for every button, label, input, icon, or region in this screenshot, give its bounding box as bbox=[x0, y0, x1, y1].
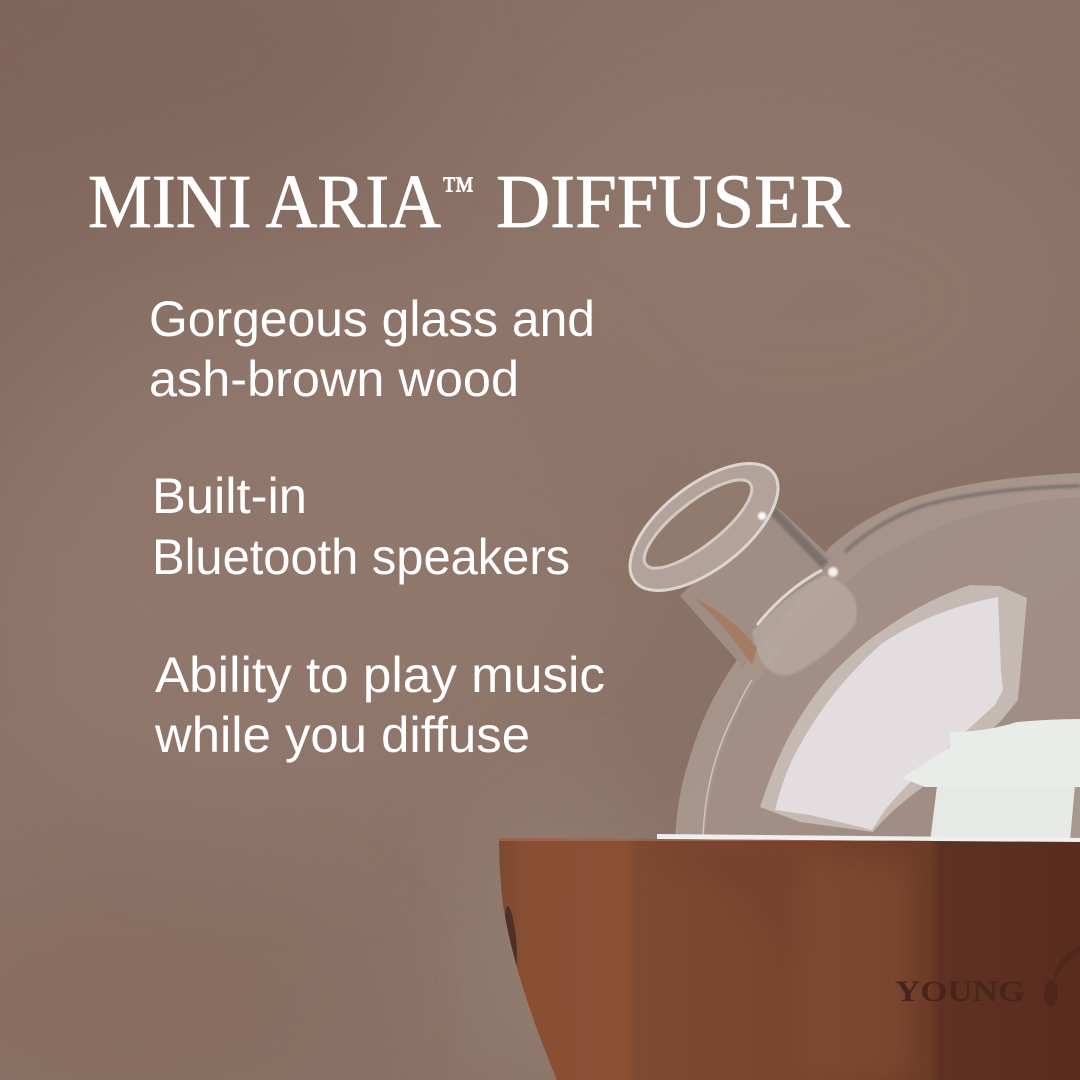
feature text: play music: Ability to play music bbox=[155, 647, 605, 703]
engraved logo bbox=[895, 945, 1080, 1008]
globe inner tint bbox=[705, 497, 1080, 840]
engraved logo: YOUNG bbox=[895, 975, 1025, 1008]
globe dark top edge reflection bbox=[845, 486, 1080, 552]
rim top highlight bbox=[499, 838, 932, 841]
neck dark reflection bbox=[772, 510, 825, 565]
white cap inside globe bbox=[902, 719, 1080, 842]
neck collar highlights bbox=[752, 575, 857, 675]
feature text: play music: while you diffuse bbox=[154, 707, 530, 763]
feature text: bluetooth speakers: Bluetooth speakers bbox=[152, 529, 570, 585]
reflection halo bbox=[760, 585, 1027, 832]
glass neck and rim bbox=[609, 440, 857, 675]
window reflection bbox=[775, 597, 1003, 830]
feature text: glass and wood: ash-brown wood bbox=[149, 351, 519, 407]
glass diffuser globe bbox=[675, 473, 1080, 840]
leaf stem bbox=[1053, 945, 1080, 983]
leaf drop bbox=[1044, 980, 1058, 1006]
rim shine bbox=[758, 512, 766, 520]
neck tube bbox=[680, 503, 832, 667]
globe left edge highlight bbox=[703, 680, 752, 838]
white base plate bbox=[657, 834, 1080, 843]
title bbox=[88, 160, 850, 244]
tan sliver bbox=[693, 597, 757, 665]
feature text: glass and wood: Gorgeous glass and bbox=[149, 291, 595, 347]
title: DIFFUSER bbox=[496, 160, 850, 244]
feature text: play music bbox=[154, 647, 605, 763]
title: MINI ARIA bbox=[88, 160, 441, 244]
rim bbox=[609, 440, 799, 614]
cap stem bbox=[930, 786, 1075, 842]
rim opening bbox=[632, 466, 764, 582]
title: ™ bbox=[442, 169, 474, 209]
dark wood knot bbox=[505, 906, 517, 966]
feature text: bluetooth speakers: Built-in bbox=[152, 468, 307, 524]
cap top bbox=[902, 719, 1080, 787]
wood bowl base bbox=[499, 838, 1080, 1080]
feature text: bluetooth speakers bbox=[152, 468, 570, 585]
globe body bbox=[675, 473, 1080, 840]
feature text: glass and wood bbox=[149, 291, 595, 407]
wood grain shading bbox=[834, 871, 900, 1069]
